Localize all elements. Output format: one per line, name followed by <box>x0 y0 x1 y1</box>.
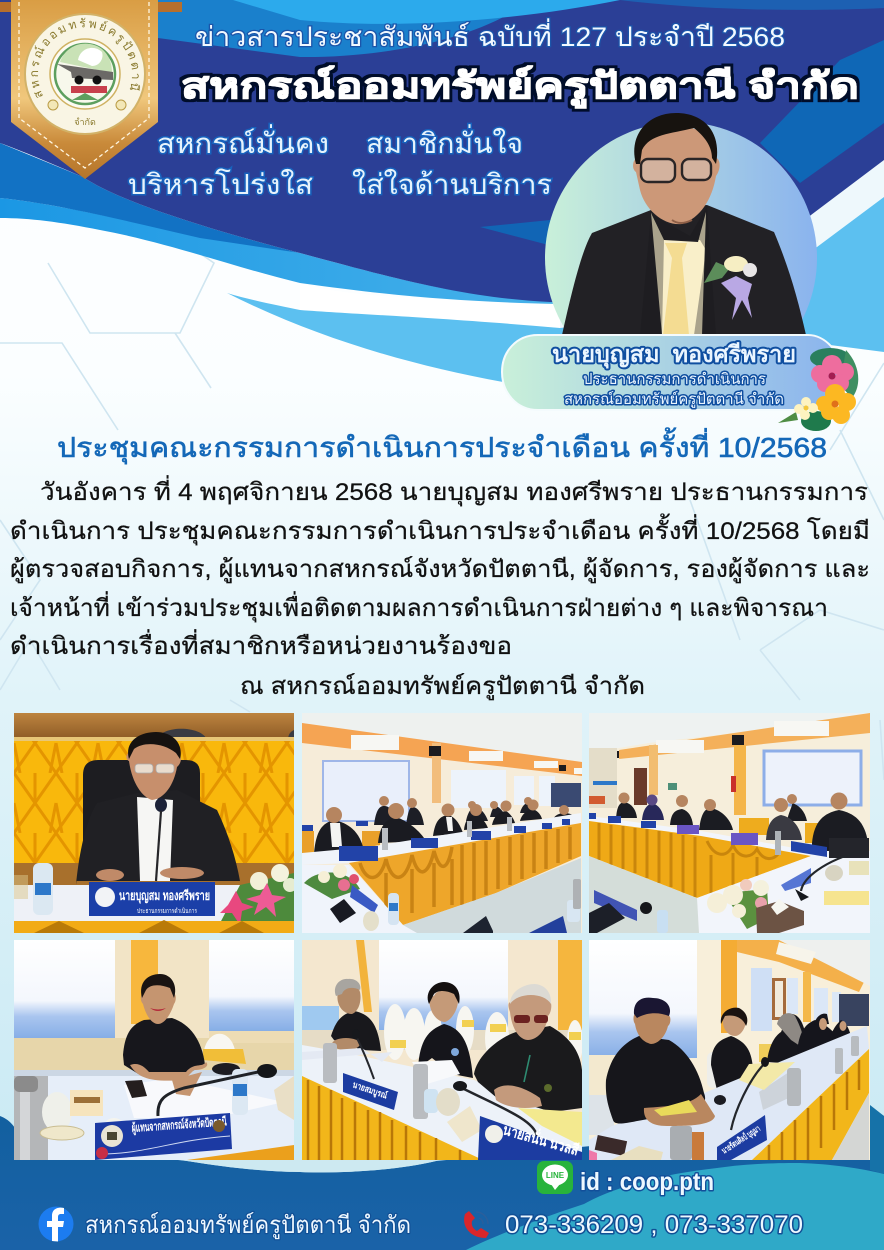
icon: LINE: LINE <box>546 1171 565 1180</box>
nameplate <box>95 1113 232 1160</box>
motto: สมาชิกมั่นใจ <box>366 124 523 159</box>
nameplate: ผู้แทนจากสหกรณ์จังหวัดปัตตานี <box>131 1114 228 1136</box>
photo: meeting room wide view right <box>589 713 870 933</box>
footer waves <box>0 1105 884 1250</box>
name plate <box>502 335 858 431</box>
body text: ผู้ตรวจสอบกิจการ, ผู้แทนจากสหกรณ์จังหวัดปัตตานี, ผู้จัดการ, รองผู้จัดการ และ <box>10 555 870 584</box>
body text: ดำเนินการ ประชุมคณะกรรมการดำเนินการประจำเดือน ครั้งที่ 10/2568 โดยมี <box>10 513 870 546</box>
name plate: นายบุญสม ทองศรีพราย <box>552 341 796 369</box>
motto <box>128 124 552 200</box>
LINE contact: id : coop.ptn <box>580 1168 714 1196</box>
heading: meeting title: ประชุมคณะกรรมการดำเนินการประจำเดือน ครั้งที่ 10/2568 <box>57 427 827 465</box>
photo: woman in black at table <box>14 940 294 1160</box>
motto: บริหารโปร่งใส <box>128 168 313 200</box>
nameplate: centre <box>343 1073 398 1110</box>
logo seal <box>24 13 146 135</box>
body text: ณ สหกรณ์ออมทรัพย์ครูปัตตานี จำกัด <box>240 672 645 701</box>
body text <box>10 475 870 701</box>
far table <box>302 831 380 855</box>
nameplate: นายรัตนศิลป์ บุญมา <box>719 1122 763 1157</box>
name plate: ประธานกรรมการดำเนินการ <box>583 371 766 388</box>
icon: LINE <box>537 1161 573 1194</box>
portrait: chairman <box>545 113 817 394</box>
header line: newsletter issue: ข่าวสารประชาสัมพันธ์ ฉบับที่ 127 ประจำปี 2568 <box>195 18 785 52</box>
nameplate <box>89 882 215 916</box>
body text: วันอังคาร ที่ 4 พฤศจิกายน 2568 นายบุญสม ทองศรีพราย ประธานกรรมการ <box>40 475 868 507</box>
LINE contact <box>537 1161 714 1196</box>
body text: เจ้าหน้าที่ เข้าร่วมประชุมเพื่อติดตามผลการดำเนินการฝ่ายต่าง ๆ และพิจารณา <box>10 591 828 623</box>
photo: meeting room wide view left <box>302 713 582 933</box>
icon: phone <box>464 1211 489 1238</box>
gold ribbon banner with cooperative logo <box>0 0 182 179</box>
nameplate: นายบุญสม ทองศรีพราย <box>119 888 210 904</box>
woman centre <box>418 982 473 1078</box>
logo seal: จำกัด <box>74 117 96 127</box>
table items <box>323 1043 482 1142</box>
nameplate: right <box>478 1116 582 1160</box>
motto: สหกรณ์มั่นคง <box>157 124 329 159</box>
title: สหกรณ์ออมทรัพย์ครูปัตตานี จำกัด <box>181 65 859 109</box>
Facebook contact: สหกรณ์ออมทรัพย์ครูปัตตานี จำกัด <box>85 1211 411 1240</box>
nameplate <box>717 1115 767 1160</box>
young man <box>606 998 715 1126</box>
photo: chairman at desk <box>14 713 294 933</box>
bald man right <box>474 984 582 1112</box>
icon: corsage <box>704 256 757 320</box>
nameplate: centre: นายสมบูรณ์ <box>351 1078 389 1102</box>
motto: ใส่ใจด้านบริการ <box>352 168 552 200</box>
header waves <box>0 0 884 395</box>
table items <box>589 1036 859 1160</box>
photo: three members at table <box>302 940 582 1160</box>
nameplate: ประธานกรรมการดำเนินการ <box>137 907 197 915</box>
flowers and tissue box <box>707 879 804 933</box>
photo: young man and members along table <box>589 940 870 1160</box>
body text: ดำเนินการเรื่องที่สมาชิกหรือหน่วยงานร้องขอ <box>10 629 512 660</box>
phone contact: 073-336209 , 073-337070 <box>505 1211 803 1239</box>
icon: Facebook <box>38 1206 74 1242</box>
icon: tropical flowers <box>778 348 858 431</box>
decorative hexagon pattern <box>0 233 884 780</box>
man left <box>331 979 381 1051</box>
logo seal: สหกรณ์ออมทรัพย์ครูปัตตานี <box>31 18 140 98</box>
chair <box>203 1034 246 1075</box>
name plate: สหกรณ์ออมทรัพย์ครูปัตตานี จำกัด <box>564 391 784 408</box>
members along table <box>711 1008 853 1090</box>
Facebook contact <box>38 1206 411 1242</box>
